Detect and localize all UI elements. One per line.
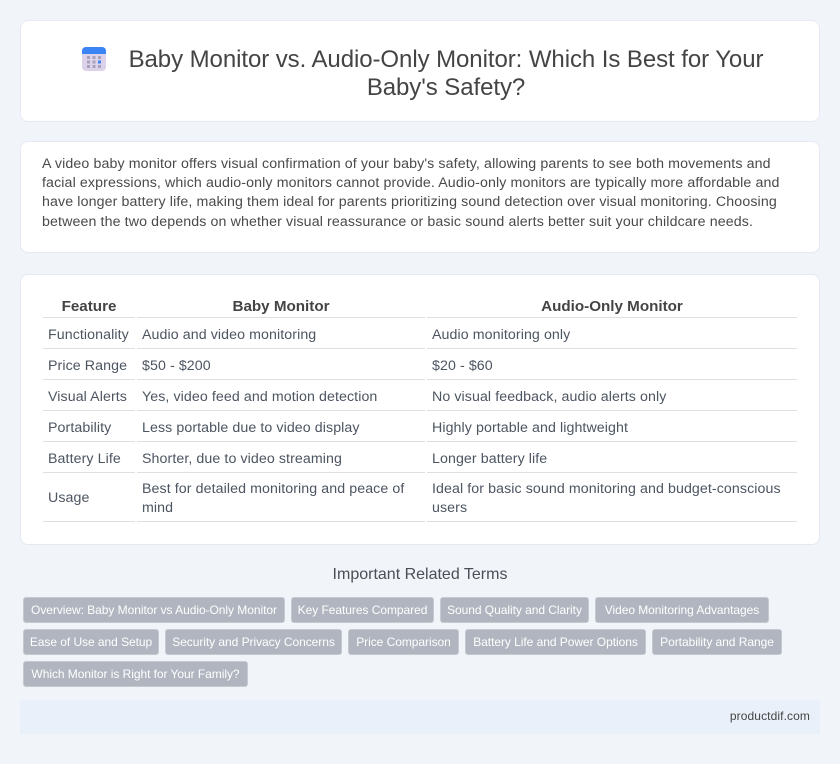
row: Battery Life [48,451,547,467]
tag: Overview [23,597,285,623]
tag: Security and Privacy Concerns [165,629,342,655]
tag: Which Monitor is Right: Which Monitor is Right for Your Family? [31,667,240,681]
tag: Battery Life and Power Options: Battery Life and Power Options [473,635,638,649]
row: Functionality: Functionality [48,327,129,343]
tag: Overview: Overview: Baby Monitor vs Audio-Only Monitor [31,603,277,617]
tag: Battery Life and Power Options [465,629,646,655]
row: Usage: Usage [48,490,89,506]
row: Functionality: Audio and video monitoring [142,327,316,343]
intro paragraph: have longer battery life, making them ideal for parents prioritizing sound detection over visual monitoring. Choosing [42,194,777,210]
tag: Key Features Compared: Key Features Compared [298,603,427,617]
row: Usage: users [432,500,467,516]
row: Battery Life: Shorter, due to video streaming [142,451,342,467]
tag: Key Features Compared [291,597,434,623]
table header: Audio-Only Monitor: Audio-Only Monitor [541,298,683,315]
tag: Video Monitoring Advantages [595,597,769,623]
row: Usage: Ideal for basic sound monitoring and budget-conscious [432,481,781,497]
header panel [20,20,820,122]
row: Battery Life: Longer battery life [432,451,547,467]
row: Usage: mind [142,500,173,516]
tag: Portability and Range [652,629,782,655]
tag: Sound Quality and Clarity: Sound Quality and Clarity [447,603,582,617]
tag: Security and Privacy Concerns: Security and Privacy Concerns [172,635,335,649]
row: Portability [48,420,628,436]
title: Baby's Safety? [367,74,525,101]
row: Portability: Highly portable and lightweight [432,420,628,436]
row: Visual Alerts: Visual Alerts [48,389,127,405]
table header: Baby Monitor: Baby Monitor [232,298,330,315]
title: Baby Monitor vs. Audio-Only Monitor: Which Is Best for Your [129,46,763,73]
tag: Ease of Use and Setup: Ease of Use and Setup [30,635,152,649]
related terms heading: Important Related Terms [333,566,507,583]
title [129,46,764,101]
row: Price Range: Price Range [48,358,127,374]
tag: Video Monitoring Advantages: Video Monitoring Advantages [605,603,759,617]
row: Visual Alerts [48,389,666,405]
row: Functionality: Audio monitoring only [432,327,570,343]
tag: Sound Quality and Clarity [440,597,589,623]
table header: Feature: Feature [62,298,116,315]
row: Battery Life: Battery Life [48,451,121,467]
row: Portability: Less portable due to video display [142,420,360,436]
icon: calendar [82,47,106,71]
row: Usage: Best for detailed monitoring and peace of [142,481,404,497]
footer bar [20,700,820,734]
row: Visual Alerts: Yes, video feed and motion detection [142,389,377,405]
intro paragraph: between the two depends on whether visual reassurance or basic sound alerts better suit your childcare needs. [42,214,753,230]
intro paragraph: facial expressions, which audio-only monitors cannot provide. Audio-only monitors are typically more affordable and [42,175,779,191]
tag: Ease of Use and Setup [23,629,159,655]
row: Price Range [48,358,493,374]
intro paragraph: A video baby monitor offers visual confirmation of your baby's safety, allowing parents to see both movements and [42,156,771,172]
row: Visual Alerts: No visual feedback, audio alerts only [432,389,666,405]
tag: Which Monitor is Right [23,661,248,687]
tag: Price Comparison [348,629,459,655]
row: Price Range: $20 - $60 [432,358,493,374]
panel: comparison table [20,274,820,545]
row: Price Range: $50 - $200 [142,358,211,374]
row: Functionality [48,327,570,343]
row: Usage [48,481,781,516]
tag: Price Comparison: Price Comparison [356,635,451,649]
panel: intro text [20,141,820,253]
footer source text: productdif.com [730,709,810,723]
tag: Portability and Range: Portability and Range [660,635,774,649]
intro paragraph [42,156,779,230]
row: Portability: Portability [48,420,111,436]
